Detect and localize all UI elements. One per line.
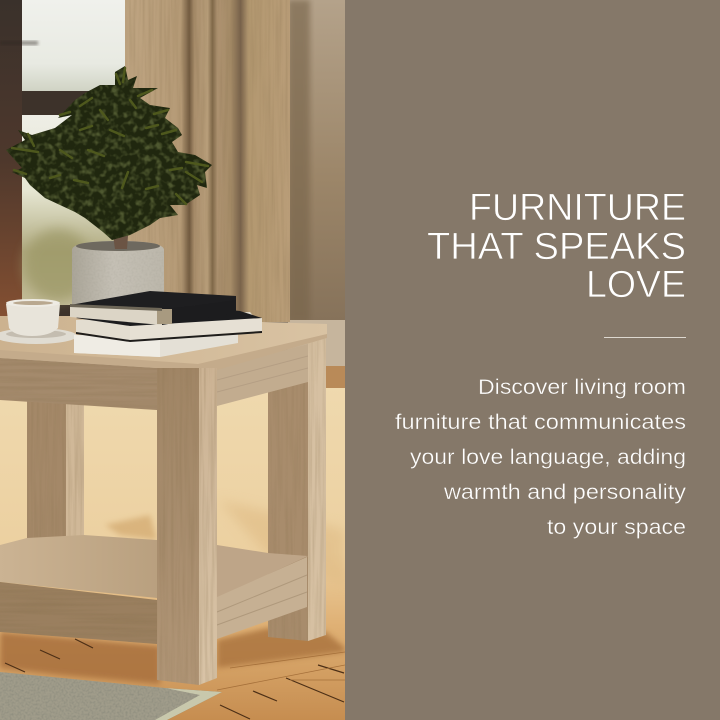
wooden floor — [0, 366, 345, 720]
heading: THAT SPEAKS — [427, 226, 686, 268]
body text — [395, 376, 687, 539]
concrete plant pot — [72, 241, 164, 305]
top black book — [74, 291, 236, 306]
back wall — [288, 0, 345, 386]
plant — [0, 60, 220, 249]
panel: taupe text panel — [345, 0, 720, 720]
leaves — [12, 68, 208, 204]
divider rule — [604, 337, 686, 338]
body text: Discover living room — [478, 376, 686, 399]
foliage mass — [6, 66, 212, 240]
curtain — [125, 0, 290, 322]
body text: furniture that communicates — [395, 411, 686, 434]
rug — [0, 670, 225, 720]
plant trunk — [114, 236, 128, 249]
body text: your love language, adding — [410, 446, 686, 469]
heading: FURNITURE — [469, 187, 686, 229]
table top — [0, 316, 327, 370]
heading: LOVE — [586, 264, 686, 306]
window and frame — [0, 0, 125, 320]
middle black book — [76, 312, 262, 340]
body text: to your space — [547, 516, 686, 539]
bottom white book — [74, 334, 238, 357]
coffee cup and saucer — [0, 299, 77, 344]
heading — [427, 187, 686, 306]
photo: living room side table scene — [0, 0, 345, 720]
back left table leg — [27, 400, 84, 540]
back right table leg — [268, 336, 326, 642]
table apron — [0, 344, 308, 413]
front table leg — [157, 368, 217, 685]
stack of books — [70, 291, 262, 357]
body text: warmth and personality — [443, 481, 687, 504]
table shelf — [0, 535, 308, 646]
